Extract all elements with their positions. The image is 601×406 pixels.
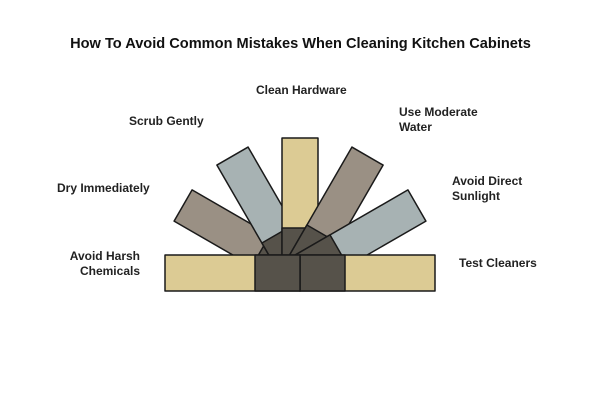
label: avoid direct sunlight: Sunlight — [452, 189, 500, 203]
blade: clean hardware — [282, 138, 318, 273]
label: use moderate water: Water — [399, 120, 432, 134]
label: scrub gently: Scrub Gently — [129, 114, 204, 128]
label: clean hardware: Clean Hardware — [256, 83, 347, 97]
label: avoid harsh chemicals — [70, 249, 140, 278]
label: dry immediately: Dry Immediately — [57, 181, 150, 195]
label: avoid harsh chemicals: Avoid Harsh — [70, 249, 140, 263]
blade: use moderate water — [284, 147, 383, 282]
label: test cleaners: Test Cleaners — [459, 256, 537, 270]
blade: scrub gently — [217, 147, 316, 282]
label: use moderate water — [399, 105, 478, 134]
label: avoid direct sunlight: Avoid Direct — [452, 174, 522, 188]
label: use moderate water: Use Moderate — [399, 105, 478, 119]
blade: dry immediately — [174, 190, 309, 289]
blade: avoid direct sunlight — [291, 190, 426, 289]
blade: avoid harsh chemicals — [165, 255, 300, 291]
label: avoid harsh chemicals: Chemicals — [80, 264, 140, 278]
blade: test cleaners — [300, 255, 435, 291]
title: How To Avoid Common Mistakes When Cleaning Kitchen Cabinets — [70, 36, 531, 52]
label: avoid direct sunlight — [452, 174, 522, 203]
